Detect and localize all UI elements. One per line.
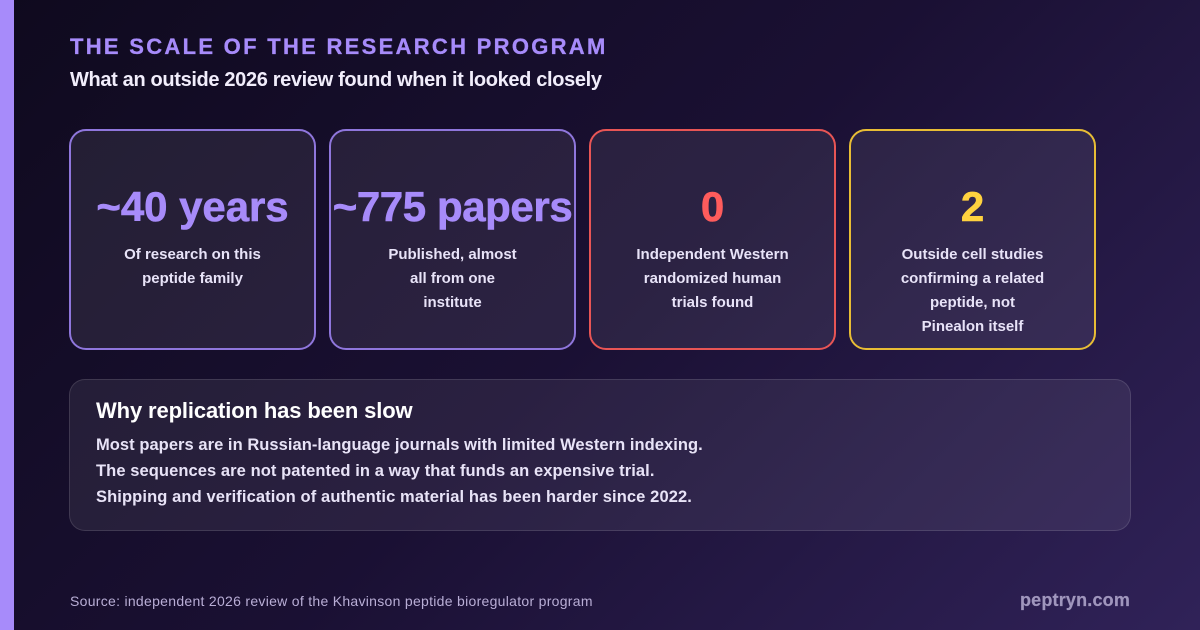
- source note: Source: independent 2026 review of the Khavinson peptide bioregulator program: [70, 593, 593, 609]
- label: western trials: [636, 246, 789, 311]
- label: outside studies: [901, 246, 1044, 335]
- label: western trials: Independent Western: [636, 246, 789, 263]
- title: THE SCALE OF THE RESEARCH PROGRAM: [70, 34, 608, 59]
- label: papers published: [388, 246, 517, 311]
- label: papers published: all from one: [410, 270, 495, 287]
- text: reasons: Most papers are in Russian-language journals with limited Western indexing.: [96, 436, 703, 454]
- label: years of research: [124, 246, 261, 287]
- panel: western trials: [589, 129, 836, 350]
- label: outside studies: Pinealon itself: [922, 318, 1023, 335]
- label: western trials: randomized human: [644, 270, 781, 287]
- stat: ~775 papers: ~775 papers: [333, 183, 572, 230]
- panel: why replication has been slow: [69, 379, 1131, 531]
- text: reasons: Shipping and verification of authentic material has been harder since 2022.: [96, 488, 692, 506]
- label: years of research: Of research on this: [124, 246, 261, 263]
- heading: why replication: Why replication has been slow: [96, 398, 413, 423]
- text: reasons: [96, 436, 703, 506]
- stat: 0: 0: [701, 183, 724, 230]
- subtitle: What an outside 2026 review found when it looked closely: [70, 69, 602, 91]
- stat: ~40 years: ~40 years: [96, 183, 289, 230]
- brand: peptryn.com: peptryn.com: [1020, 590, 1130, 610]
- label: western trials: trials found: [672, 294, 753, 311]
- label: outside studies: Outside cell studies: [902, 246, 1043, 263]
- panel: papers published: [329, 129, 576, 350]
- label: outside studies: peptide, not: [930, 294, 1015, 311]
- label: outside studies: confirming a related: [901, 270, 1044, 287]
- label: papers published: Published, almost: [388, 246, 517, 263]
- label: papers published: institute: [423, 294, 482, 311]
- panel: years of research: [69, 129, 316, 350]
- stat: 2: 2: [961, 183, 984, 230]
- label: years of research: peptide family: [142, 270, 243, 287]
- text: reasons: The sequences are not patented in a way that funds an expensive trial.: [96, 462, 655, 480]
- panel: outside studies: [849, 129, 1096, 350]
- left accent bar: [0, 0, 14, 630]
